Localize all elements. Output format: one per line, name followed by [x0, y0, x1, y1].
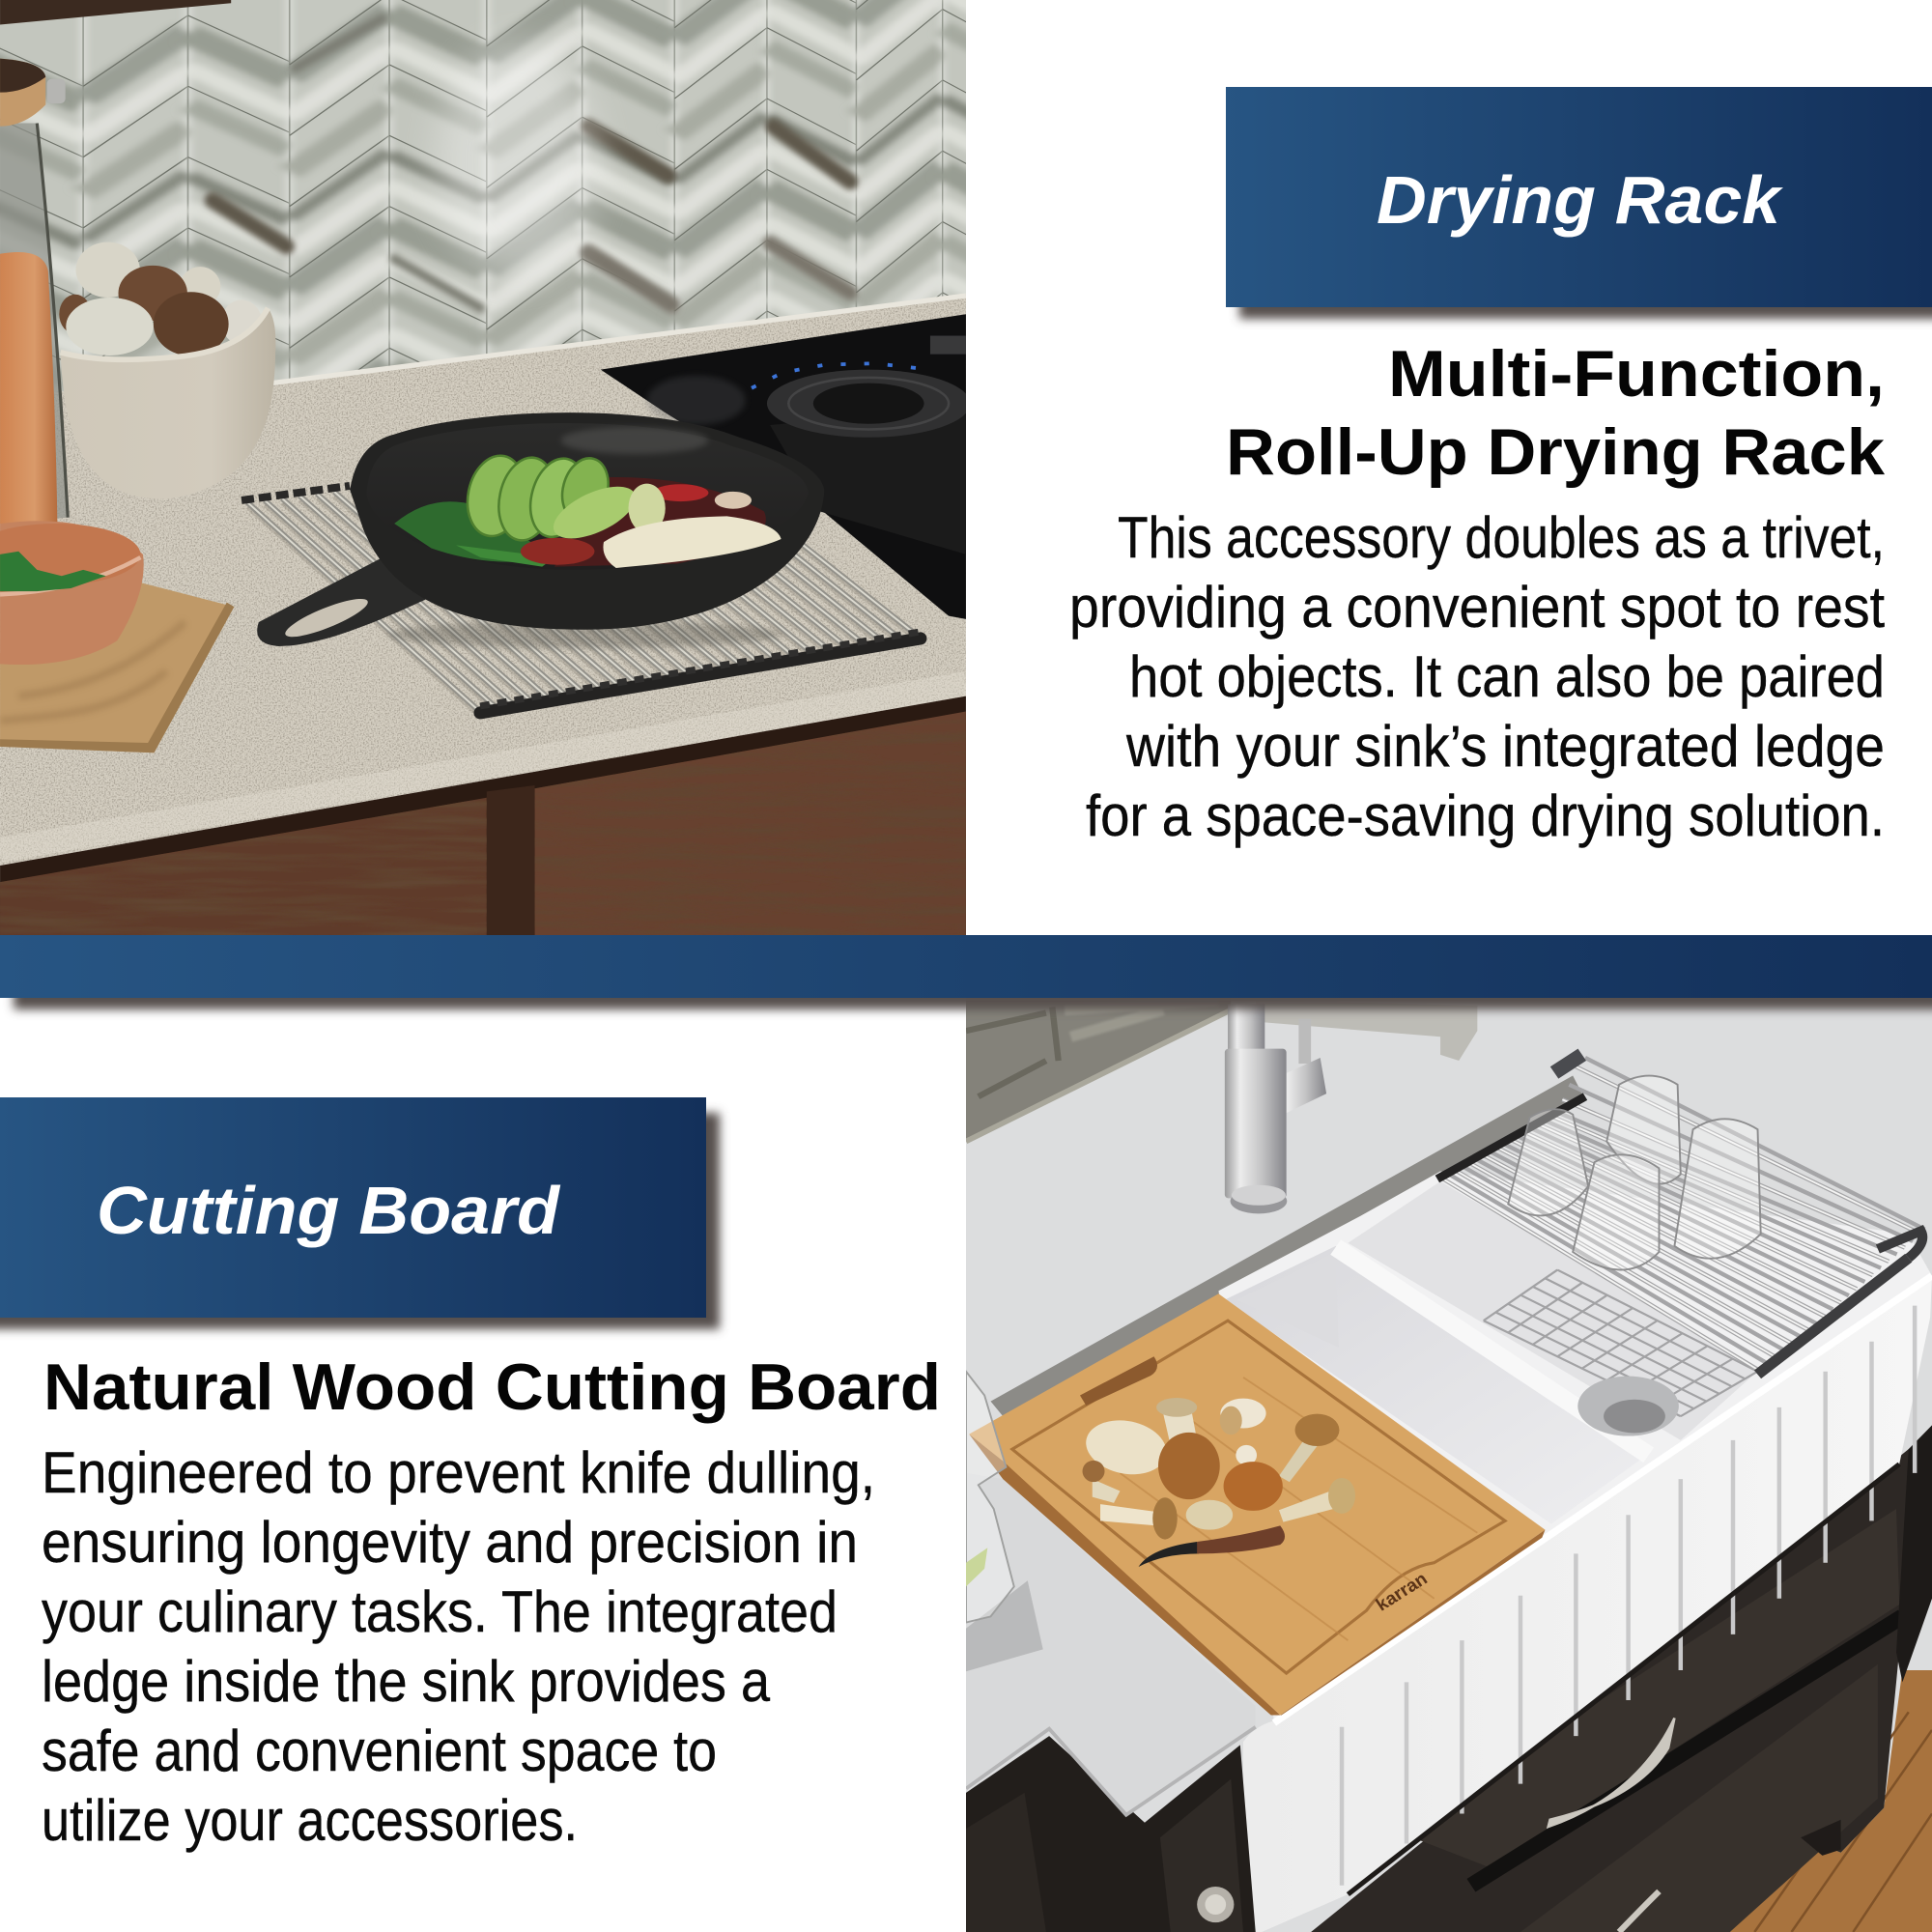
sink back edge	[991, 1076, 1582, 1416]
text block: drying rack description: providing a convenient spot to rest	[1069, 575, 1885, 639]
fluted farmhouse apron	[1243, 1276, 1932, 1932]
faucet	[1225, 1000, 1477, 1213]
olive wood board	[0, 582, 234, 753]
text block: cutting board description: utilize your accessories.	[42, 1788, 578, 1853]
mushrooms	[1081, 1398, 1355, 1540]
text block: cutting board description: your culinary tasks. The integrated	[42, 1579, 838, 1644]
heading: Natural Wood Cutting Board: Natural Wood Cutting Board	[43, 1350, 941, 1424]
dark drawers	[1311, 1425, 1932, 1932]
brick wall	[966, 995, 1231, 1142]
drinking glasses on rack	[1508, 1076, 1761, 1270]
board logo: karran	[1372, 1568, 1431, 1615]
roll-up drying rack over sink	[1437, 1055, 1924, 1375]
banner: Cutting Board: Cutting Board	[97, 1173, 560, 1248]
sink rim and basins	[1218, 1171, 1932, 1721]
photo: skillet on roll-up drying rack	[0, 0, 966, 935]
text block: cutting board description	[42, 1440, 875, 1853]
speckled countertop	[0, 295, 966, 866]
text block: cutting board description: Engineered to prevent knife dulling,	[42, 1440, 875, 1505]
divider band	[0, 935, 1932, 1009]
quartz countertop	[966, 995, 1932, 1932]
copper bowl with herbs	[0, 521, 144, 665]
banner: Cutting Board	[0, 1097, 720, 1329]
heading: Multi-Function, Roll-Up Drying Rack: Roll-Up Drying Rack	[1226, 415, 1885, 489]
floor	[1730, 1670, 1932, 1932]
text block: cutting board description: ensuring longevity and precision in	[42, 1510, 858, 1575]
sink wire grid and drain	[1484, 1270, 1758, 1436]
heading: Multi-Function, Roll-Up Drying Rack	[1226, 337, 1885, 489]
cast iron skillet with food	[257, 412, 824, 648]
wooden cabinet fronts	[0, 696, 966, 935]
photo: farmhouse sink with cutting board	[966, 1003, 1932, 1932]
banner: Drying Rack	[1226, 87, 1932, 319]
glass jar with juice	[0, 59, 68, 524]
text block: drying rack description	[1069, 505, 1885, 848]
banner: Drying Rack: Drying Rack	[1377, 162, 1783, 238]
bamboo cutting board with mushrooms	[969, 1293, 1545, 1715]
chevron tile backsplash	[0, 0, 1029, 643]
heading: Multi-Function, Roll-Up Drying Rack: Multi-Function,	[1388, 337, 1885, 411]
drying rack	[242, 449, 921, 716]
upper cabinet strip	[0, 0, 231, 25]
text block: cutting board description: ledge inside the sink provides a	[42, 1649, 771, 1714]
water glass and napkin	[966, 1372, 1043, 1671]
text block: cutting board description: safe and convenient space to	[42, 1719, 717, 1783]
induction cooktop	[601, 314, 970, 619]
lower-left counter and cabinet	[966, 1473, 1256, 1932]
hawkbill knife	[1139, 1525, 1285, 1567]
egg bowl	[59, 242, 275, 499]
skillet food: sauce, greens, avocado, egg	[394, 450, 781, 568]
text block: drying rack description: with your sink’s integrated ledge	[1125, 714, 1885, 779]
